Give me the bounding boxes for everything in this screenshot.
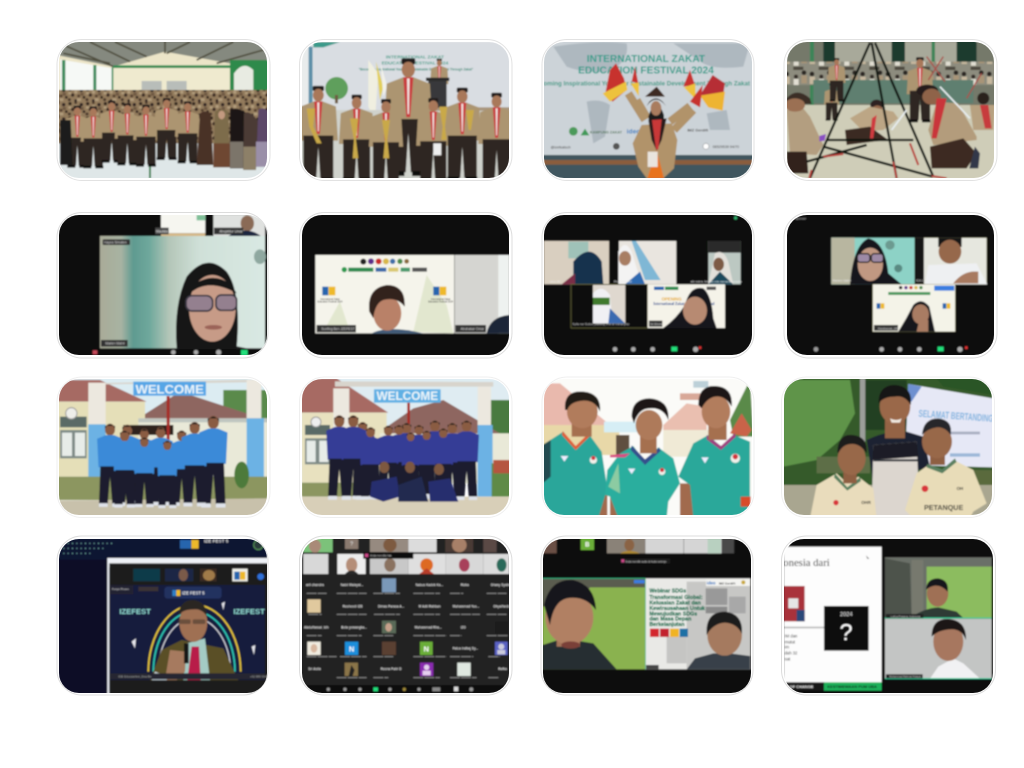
- tile: three boys in teal jerseys: [540, 377, 754, 520]
- tile: online meeting gallery view: Abdulfansal_ldh: [304, 625, 329, 629]
- tile: blue jersey team at welcome gate: [57, 377, 270, 520]
- tile: webinar keynote speaker: IDE Educatefest_Dea Be: [118, 675, 152, 679]
- tile: SDG webinar slide with speakers: dan Masa Depan: [649, 617, 691, 623]
- tile: online meeting five participants: Sri Elviza: [650, 322, 663, 326]
- tile: online meeting gallery view: Dimas Parasa A...: [378, 604, 404, 608]
- tile: online meeting five participants: abi sukra, febrian mts zamanahurraida: [691, 279, 742, 283]
- tile: slide with 2024 question mark and speakers: dah 32: [785, 651, 798, 656]
- tile: online meeting gallery view: M Adil Rahbun: [419, 604, 441, 608]
- tile: online meeting gallery view: Nabil Malayai...: [341, 583, 363, 587]
- tile: online meeting gallery view: Nabus Kadek Ka...: [416, 583, 443, 587]
- tile: webinar keynote speaker: IZEFEST: [233, 607, 265, 616]
- tile: SDG webinar slide with speakers: Mewujudkan SDGs: [649, 611, 697, 617]
- tile: slide with 2024 question mark and speakers: onesia dari: [783, 558, 830, 569]
- tile: webinar keynote speaker: [57, 536, 270, 697]
- tile: online meeting gallery view: Ghany Syaha: [491, 583, 511, 587]
- tile: SDG webinar slide with speakers: Kewirausahaan Untuk: [649, 606, 705, 612]
- tile: online meeting gallery view: Anda memiliki hak: [370, 554, 392, 558]
- tile: three boys with banner: OHR: [861, 500, 872, 505]
- tile: online meeting five participants: OPENING: [662, 297, 682, 302]
- tile: online meeting gallery view: Muhammad Yus...: [453, 604, 479, 608]
- tile: girl with flags at festival banner: 08529539 94/70: [713, 145, 739, 149]
- tile: online meeting presenter with logos: Education Festival 2024: [318, 301, 343, 304]
- tile: online meeting presenter with logos: [298, 212, 513, 360]
- tile: blue jersey team at welcome gate: WELCOME: [135, 382, 204, 396]
- tile: webinar keynote speaker: +62 889 9044: [250, 675, 269, 679]
- tile: online meeting gallery view: Sri Asila: [308, 667, 321, 671]
- tile: online meeting presenter with logos: Sunfing Ben JZEFEST: [321, 327, 355, 331]
- tile: scouts with trophies: [299, 40, 515, 183]
- tile: online meeting three participants: Sponsor: [795, 217, 806, 221]
- tile: slide with 2024 question mark and speakers: KESTIMEWAAN PUM UBA: [827, 684, 877, 689]
- tile: online meeting gallery view: [298, 536, 515, 697]
- tile: webinar keynote speaker: Fungsi Proses: [112, 587, 130, 591]
- tile: navy jersey team at welcome gate: WELCOME: [376, 390, 438, 403]
- tile: online meeting five participants: International Zakat Education Festival: [653, 302, 714, 306]
- tile: girl with flags at festival banner: oming Inspirational Youth for Sustainable Development Through Zakat: [543, 80, 751, 87]
- tile: online meeting three participants: ICA 1: [916, 279, 924, 283]
- tile: online meeting gallery view: ?: [350, 542, 353, 548]
- tile: online meeting three participants: Mariem Idahri: [833, 279, 851, 283]
- tile: online meeting gallery view: aril chandra: [306, 583, 324, 587]
- tile: scouts with trophies: EDUCATION FESTIVAL 2024: [382, 60, 449, 66]
- tile: SDG webinar slide with speakers: IMZ GerdiFi: [719, 581, 736, 585]
- tile: online meeting five participants: eeru 36: [550, 279, 560, 283]
- tile: girl with flags at festival banner: ideo: [627, 128, 640, 135]
- tile: slide with 2024 question mark and speakers: im: [785, 645, 790, 650]
- tile: online meeting speaker with glasses: Abujafdur Umar: [219, 229, 244, 233]
- tile: SDG webinar slide with speakers: [540, 536, 753, 697]
- tile: online meeting gallery view: Ohyalfardi.uis: [493, 604, 515, 608]
- tile: three boys with banner: [782, 377, 995, 520]
- tile: scouts with trophies: INTERNATIONAL ZAKAT: [386, 54, 444, 60]
- tile: scouts in hall: [57, 40, 270, 180]
- tile: SDG webinar slide with speakers: ideo: [707, 580, 716, 585]
- tile: slide with 2024 question mark and speakers: ?: [839, 619, 852, 645]
- tile: webinar keynote speaker: IZE FEST 5: [182, 591, 205, 596]
- tile: online meeting five participants: Syifa nur Gufon_padang_mts al manarghip: [572, 322, 630, 326]
- tile: webinar keynote speaker: IZE FEST 5: [204, 539, 229, 544]
- tile: slide with 2024 question mark and speakers: sat: [785, 657, 791, 662]
- tile: SDG webinar slide with speakers: Berkelanjutan: [649, 622, 685, 628]
- tile: slide with 2024 question mark and speakers: [782, 536, 996, 697]
- tile: online meeting gallery view: Rosna Putri D: [381, 667, 402, 671]
- tile: girl with flags at festival banner: IMZ Gerdifi: [687, 127, 708, 132]
- tile: SDG webinar slide with speakers: Keluasian Zakat dan: [649, 601, 701, 607]
- photo grid: [56, 39, 998, 696]
- tile: online meeting gallery view: IZO: [461, 625, 466, 629]
- tile: SDG webinar slide with speakers: Webinar SDGs: [649, 589, 686, 595]
- tile: online meeting gallery view: Rafka: [498, 667, 507, 671]
- tile: online meeting presenter with logos: Education Festival 2024: [428, 301, 454, 304]
- tile: SDG webinar slide with speakers: Transformasi Global:: [649, 595, 703, 601]
- tile: scouts building tripod: [783, 40, 997, 180]
- tile: slide with 2024 question mark and speakers: mutut: [785, 639, 796, 644]
- tile: online meeting gallery view: N: [424, 644, 429, 653]
- tile: scouts with trophies: "Becoming Inspirational Youth for Sustainable Development Through Zakat": [359, 68, 474, 72]
- tile: girl with flags at festival banner: @izefsatsch: [551, 145, 571, 149]
- tile: online meeting speaker with glasses: Hayva Simaten: [104, 240, 127, 244]
- tile: slide with 2024 question mark and speakers: IM dan: [785, 634, 798, 639]
- tile: girl with flags at festival banner: [540, 40, 757, 180]
- tile: slide with 2024 question mark and speakers: Lutfiya Pratama, Indonesia: [891, 615, 921, 618]
- tile: online meeting five participants: Pira Zulrahtul: [614, 279, 632, 283]
- tile: online meeting three participants: [783, 212, 998, 360]
- tile: online meeting speaker with glasses: Marien Mahri: [105, 342, 125, 346]
- tile: online meeting gallery view: Bela yemangka...: [341, 625, 367, 629]
- tile: slide with 2024 question mark and speakers: 2024: [840, 612, 853, 618]
- tile: online meeting presenter with logos: Abubakar Omar: [461, 327, 485, 331]
- tile: online meeting gallery view: N: [349, 644, 354, 653]
- tile: navy jersey team at welcome gate: [298, 377, 513, 520]
- tile: slide with 2024 question mark and speakers: T OF CHANGE: [786, 684, 814, 689]
- tile: three boys with banner: OH: [957, 486, 963, 491]
- tile: girl with flags at festival banner: KAMPUNG ZAKAT: [590, 130, 623, 134]
- tile: online meeting gallery view: Falca Indhaj Sy...: [453, 646, 478, 650]
- tile: three boys with banner: PETANQUE: [924, 505, 964, 512]
- tile: slide with 2024 question mark and speakers: Muhammad Rahmat Hidayat: [889, 676, 921, 679]
- tile: online meeting five participants: [540, 212, 755, 360]
- tile: online meeting gallery view: Rizka: [461, 583, 469, 587]
- tile: online meeting gallery view: Muhammad Rha...: [415, 625, 442, 629]
- tile: SDG webinar slide with speakers: Anda memiliki audio di Audio settings: [625, 560, 667, 563]
- tile: girl with flags at festival banner: EDUCATION FESTIVAL 2024: [578, 65, 714, 76]
- tile: online meeting speaker with glasses: [57, 212, 270, 360]
- tile: online meeting speaker with glasses: Maulida: [156, 229, 168, 233]
- tile: online meeting presenter with logos: International Zakat: [431, 298, 451, 301]
- tile: webinar keynote speaker: IZEFEST: [119, 607, 151, 616]
- tile: online meeting three participants: Dwidiawati_IZE: [878, 326, 899, 330]
- tile: girl with flags at festival banner: INTERNATIONAL ZAKAT: [587, 54, 705, 65]
- tile: SDG webinar slide with speakers: B: [585, 542, 590, 548]
- tile: online meeting gallery view: Rosheedi IZE: [343, 604, 363, 608]
- tile: online meeting presenter with logos: International Zakat: [320, 298, 340, 301]
